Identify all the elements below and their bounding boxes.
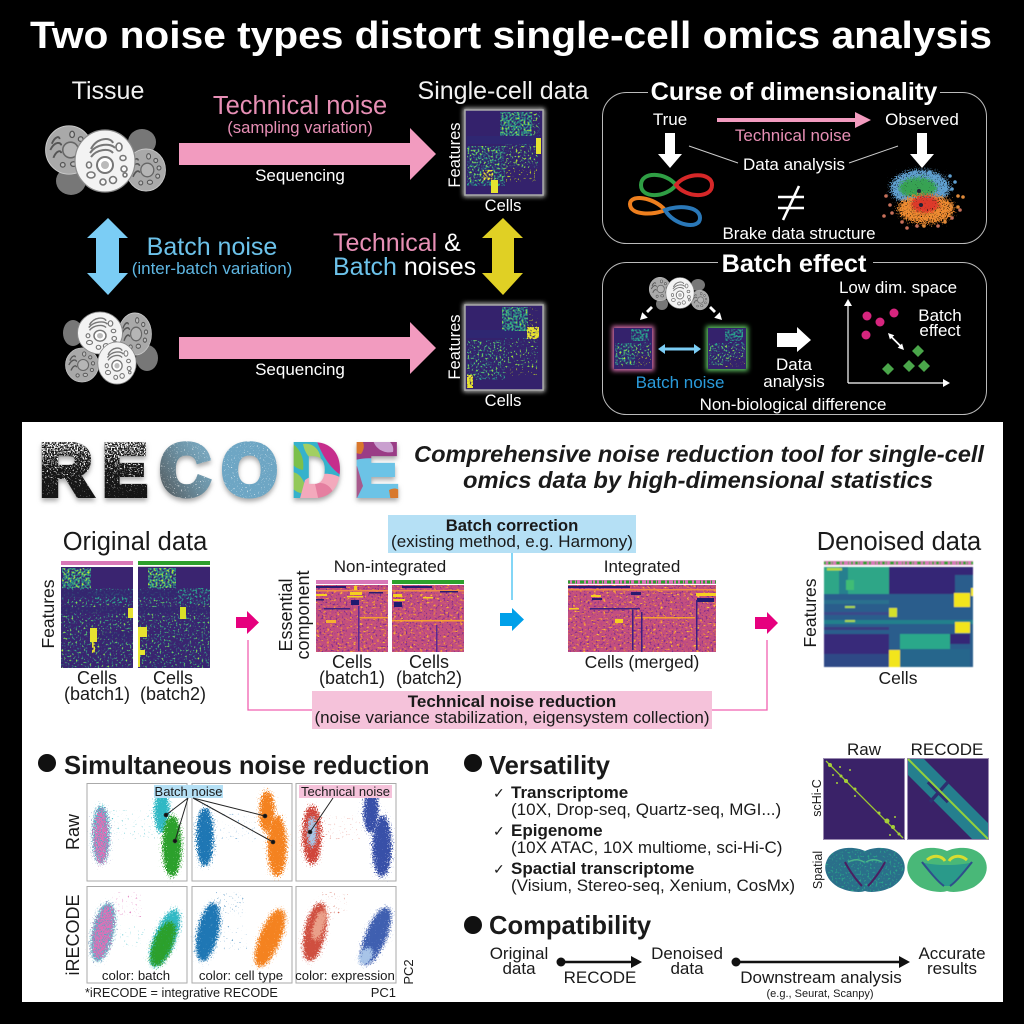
panel: curse of dimensionality [602, 78, 986, 244]
footnote: iRECODE: *iRECODE = integrative RECODE [85, 986, 278, 1000]
chart: iRECODE color expression [296, 886, 398, 983]
label: cells batch 2: Cells [409, 652, 449, 672]
icon: top tissue cells [46, 126, 165, 195]
label: original data: data [502, 959, 536, 978]
chart: low dim space [844, 299, 950, 387]
heading: versatility: Versatility [489, 752, 611, 780]
heatmap: batch 2 [706, 326, 748, 371]
arrow: batch distance [888, 333, 904, 350]
captions: color: color: cell type [199, 968, 283, 983]
heading: batch effect: Batch effect [722, 250, 867, 278]
arrow: batch double arrow [658, 344, 701, 354]
pointers: noise callouts [164, 798, 333, 844]
label: data analysis [763, 355, 825, 391]
callout: batch correction: Batch correction [446, 516, 578, 535]
label: cells batch 1: (batch1) [64, 684, 130, 704]
label: technical noise [213, 92, 387, 137]
label: scHi-C: scHi-C [810, 779, 824, 817]
axis label: PC1: PC1 [371, 985, 396, 1000]
logo: RECODE: O [222, 434, 277, 514]
heatmap: integrated [568, 580, 716, 652]
map: spatial raw [825, 848, 905, 892]
label: accurate results: Accurate [918, 944, 986, 963]
arrow: bottom sequencing [179, 322, 436, 374]
connector: batch correction [511, 553, 513, 600]
label: iRECODE: iRECODE [63, 894, 83, 976]
label: batch noise [132, 233, 292, 278]
label: features bottom: Features [446, 314, 464, 380]
logo: RECODE: D [292, 434, 340, 514]
heatmap: original batch 1 [61, 561, 133, 668]
label: true: True [653, 110, 687, 129]
heading: curse of dimensionality: Curse of dimensionality [651, 78, 937, 106]
label: technical noise: Technical noise [735, 126, 851, 145]
heading: original data: Original data [63, 528, 208, 556]
captions: color: color: batch [102, 968, 170, 983]
label: non-integrated: Non-integrated [334, 557, 446, 576]
points: batch two [882, 345, 930, 375]
subtitle: omics data by high-dimensional statistics [463, 467, 933, 493]
chart: raw color cell type [192, 784, 292, 881]
callout: technical noise reduction: (noise variance stabilization, eigensystem collection) [315, 708, 709, 727]
list: versatility: ✓ [493, 785, 505, 801]
arrow: to analysis [777, 327, 811, 352]
captions: color [102, 968, 395, 983]
label: top sequencing: Sequencing [255, 166, 345, 185]
heading: simultaneous noise reduction: Simultaneous noise reduction [64, 752, 429, 780]
chart: observed scatter [882, 169, 965, 230]
panel: RECODE [22, 422, 1003, 1002]
arrow: observed down [910, 133, 934, 168]
chart: raw color expression [296, 784, 396, 881]
icon: infinity loops [630, 175, 712, 225]
label: cells batch 1: Cells [77, 668, 117, 688]
label: data analysis: Data analysis [743, 155, 845, 174]
arrows: tissue to data [640, 307, 722, 320]
subtitle: Comprehensive noise reduction tool for single-cell [414, 441, 985, 467]
chart: iRECODE color cell type [191, 886, 292, 983]
list: versatility: (10X, Drop-seq, Quartz-seq, MGI...) [511, 800, 781, 819]
callout: technical noise reduction: Technical noise reduction [408, 692, 616, 711]
list: versatility: (Visium, Stereo-seq, Xenium, CosMx) [511, 876, 795, 895]
arrow: recode step [556, 956, 642, 968]
heatmap: non-integrated batch 1 [316, 580, 388, 652]
label: denoised data [651, 944, 723, 978]
arrow: true down [658, 133, 682, 168]
arrow: pink to essential [236, 611, 259, 634]
logo: RECODE: E [103, 431, 147, 511]
heading: single-cell data: Single-cell data [418, 77, 589, 105]
logo: RECODE: E [355, 434, 398, 514]
label: essential component: Essential [276, 578, 296, 652]
heatmap: scHi-C RECODE [908, 758, 988, 840]
logo: RECODE: O [222, 431, 277, 511]
logo: RECODE: R [40, 431, 92, 511]
subtitle [414, 441, 985, 493]
label: brake data structure: Brake data structure [722, 224, 876, 243]
logo: RECODE: O [222, 431, 277, 511]
label: data analysis: Data [776, 355, 812, 374]
arrow: technical noise [717, 112, 871, 128]
heading: denoised data: Denoised data [817, 528, 982, 556]
label: original data: Original [490, 944, 548, 963]
label: batch noise: Batch noise [636, 373, 724, 392]
label: cells batch 1: (batch1) [319, 668, 385, 688]
label: accurate results: results [927, 959, 977, 978]
label: downstream analysis: (e.g., Seurat, Scanpy) [766, 988, 874, 1000]
points: batch one [862, 308, 898, 340]
callout: batch correction [388, 515, 636, 553]
heatmap: non-integrated batch 2 [392, 580, 464, 652]
axis label: PC2: PC2 [401, 959, 416, 985]
label: cells batch 1: Cells [332, 652, 372, 672]
arrow: yellow double arrow [482, 218, 523, 295]
label: denoised data: data [670, 959, 704, 978]
label: RECODE column: RECODE [911, 740, 983, 759]
list: versatility: ✓ [493, 861, 505, 877]
label: technical and batch noises: Batch noises [333, 253, 476, 281]
label: accurate results [918, 944, 986, 978]
label: essential component [276, 570, 313, 660]
label: bottom sequencing: Sequencing [255, 360, 345, 379]
label: low dim space: Low dim. space [839, 278, 957, 297]
label: observed: Observed [885, 110, 959, 129]
logo: RECODE: R [40, 431, 92, 511]
label: technical noise: (sampling variation) [227, 118, 373, 137]
logo: RECODE: D [292, 431, 340, 511]
label: batch effect note: Batch [918, 306, 962, 325]
arrow: top sequencing [179, 128, 436, 180]
heatmap: top single-cell [465, 110, 543, 195]
icon: tissue cells [649, 277, 709, 310]
label: technical and batch noises: Technical & [333, 229, 461, 257]
label: batch noise: (inter-batch variation) [132, 259, 292, 278]
arrow: pink to denoised [755, 612, 778, 634]
logo: RECODE: E [103, 434, 147, 514]
heatmap: bottom single-cell [465, 305, 543, 390]
label: features: Features [38, 579, 58, 649]
label: cells batch 2: (batch2) [140, 684, 206, 704]
label: data analysis: analysis [763, 372, 825, 391]
arrow: blue [500, 608, 524, 631]
chart: raw color batch [87, 784, 187, 881]
label: cells batch 2 [140, 668, 206, 704]
heatmap: batch 1 [612, 326, 654, 371]
label: cells merged: Cells (merged) [585, 652, 699, 672]
list: versatility [493, 783, 795, 895]
list: versatility: (10X ATAC, 10X multiome, sci-Hi-C) [511, 838, 782, 857]
label: cells batch 1 [64, 668, 130, 704]
captions: color: color: expression [295, 968, 395, 983]
label: features: Features [800, 578, 820, 648]
list: versatility: Transcriptome [511, 783, 628, 802]
label: original data [490, 944, 548, 978]
callout: technical noise: Technical noise [301, 784, 390, 799]
logo: RECODE: R [40, 434, 92, 514]
connector: technical noise [248, 640, 767, 710]
list: versatility: ✓ [493, 823, 505, 839]
title: Two noise types distort single-cell omics analysis [30, 15, 992, 57]
label: non-biological difference: Non-biological difference [700, 395, 886, 414]
label: cells top: Cells [485, 197, 521, 215]
label: cells batch 2: (batch2) [396, 668, 462, 688]
heatmap: denoised [824, 561, 973, 667]
label: batch effect note: effect [919, 321, 961, 340]
label: technical and batch noises [333, 229, 476, 281]
label: cells: Cells [879, 668, 918, 688]
label: integrated: Integrated [604, 557, 680, 576]
icon: bottom tissue cells [63, 312, 158, 384]
map: spatial RECODE [907, 848, 987, 892]
label: recode step: RECODE [564, 968, 636, 987]
logo: RECODE: C [160, 431, 210, 511]
logo: RECODE [39, 441, 401, 504]
logo: RECODE: C [160, 434, 210, 514]
label: cells batch 2 [396, 652, 462, 688]
label: essential component: component [293, 570, 313, 660]
logo: RECODE: E [103, 431, 147, 511]
connector lines [689, 146, 898, 163]
label: spatial: Spatial [811, 851, 825, 889]
heatmap: scHi-C raw [824, 758, 904, 840]
callout: batch noise: Batch noise [155, 784, 222, 799]
callout: batch correction: (existing method, e.g. Harmony) [391, 532, 633, 551]
symbol: not equal [778, 186, 804, 220]
label: batch noise: Batch noise [147, 233, 277, 261]
list: versatility: Spactial transcriptome [511, 859, 694, 878]
heading: compatibility: Compatibility [489, 912, 652, 940]
list: versatility: Epigenome [511, 821, 603, 840]
label: cells bottom: Cells [485, 392, 521, 410]
logo: RECODE: E [355, 431, 398, 511]
logo: RECODE: C [160, 431, 210, 511]
panel: noise overview [46, 77, 589, 410]
label: downstream analysis: Downstream analysis [740, 968, 902, 987]
label: batch effect note [918, 306, 962, 340]
label: technical noise: Technical noise [213, 92, 387, 120]
label: cells batch 2: Cells [153, 668, 193, 688]
label: raw: Raw [63, 813, 83, 850]
label: raw column: Raw [847, 740, 882, 759]
heatmap: original batch 2 [138, 561, 210, 668]
chart: iRECODE color batch [86, 886, 187, 983]
arrow: downstream step [732, 956, 910, 968]
heading: tissue: Tissue [72, 77, 144, 105]
callout: technical noise reduction [312, 691, 712, 729]
panel: batch effect [602, 250, 986, 414]
label: downstream analysis [740, 968, 902, 1000]
label: cells batch 1 [319, 652, 385, 688]
arrow: batch double arrow [87, 218, 128, 295]
label: features top: Features [446, 122, 464, 188]
label: denoised data: Denoised [651, 944, 723, 963]
